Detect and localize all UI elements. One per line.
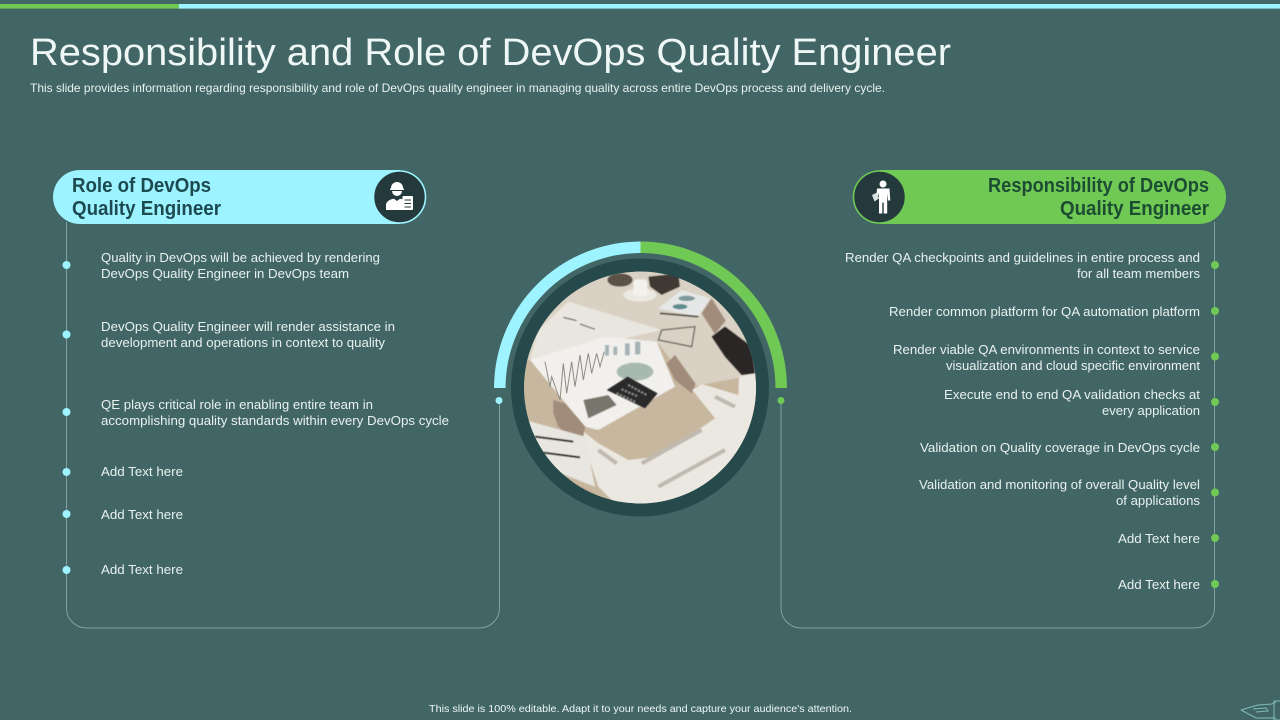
responsibility text: Render viable QA environments in context to service — [893, 343, 1200, 357]
heading pill: role — [53, 170, 400, 224]
responsibility text: Execute end to end QA validation checks at — [944, 388, 1201, 402]
role text: accomplishing quality standards within every DevOps cycle — [101, 414, 449, 428]
panel: role of DevOps quality engineer — [53, 170, 502, 628]
role text: QE plays critical role in enabling entire team in — [101, 398, 373, 412]
photo: team reviewing charts at a desk — [524, 272, 756, 504]
role text: Add Text here — [101, 508, 183, 522]
subtitle: This slide provides information regarding responsibility and role of DevOps quality engineer in managing quality across entire DevOps process and delivery cycle. — [30, 81, 885, 95]
responsibility text: every application — [1102, 404, 1200, 418]
arc: green — [640, 247, 781, 388]
heading pill: responsibility: Quality Engineer — [1060, 198, 1209, 220]
role text: DevOps Quality Engineer in DevOps team — [101, 267, 349, 281]
responsibility text — [845, 251, 1201, 592]
line chart strokes on paper — [545, 352, 604, 400]
heading pill: responsibility — [880, 170, 1226, 224]
icon: engineer with clipboard — [374, 171, 426, 223]
role bullets — [62, 261, 502, 574]
responsibility text: Add Text here — [1118, 532, 1200, 546]
responsibility text: Validation and monitoring of overall Quality level — [919, 478, 1200, 492]
responsibility text: for all team members — [1077, 267, 1200, 281]
role text — [101, 251, 449, 577]
role text: DevOps Quality Engineer will render assistance in — [101, 320, 395, 334]
icon: hand outline — [1241, 701, 1280, 720]
responsibility text: Render common platform for QA automation platform — [889, 305, 1200, 319]
panel outline: role — [66, 222, 500, 628]
arc: cyan — [500, 247, 640, 388]
responsibility text: Validation on Quality coverage in DevOps cycle — [920, 441, 1200, 455]
heading pill: responsibility: Responsibility of DevOps — [988, 175, 1209, 197]
footer note: This slide is 100% editable. Adapt it to your needs and capture your audience's attention. — [429, 703, 852, 715]
icon: standing engineer — [854, 171, 906, 223]
title: Responsibility and Role of DevOps Quality Engineer — [30, 32, 951, 74]
role text: Quality in DevOps will be achieved by rendering — [101, 251, 380, 265]
responsibility bullets — [778, 261, 1219, 588]
central graphic: arcs and photo — [500, 247, 781, 517]
role text: Add Text here — [101, 563, 183, 577]
responsibility text: of applications — [1116, 494, 1200, 508]
dark ring — [511, 258, 769, 516]
heading pill: role: Role of DevOps — [72, 175, 211, 197]
heading pill: role: Quality Engineer — [72, 198, 221, 220]
panel outline: responsibility — [781, 222, 1214, 628]
panel: responsibility of DevOps quality engineer — [778, 170, 1226, 628]
responsibility text: visualization and cloud specific environment — [946, 359, 1201, 373]
top accent bar — [0, 4, 1280, 9]
role text: Add Text here — [101, 465, 183, 479]
responsibility text: Render QA checkpoints and guidelines in entire process and — [845, 251, 1200, 265]
role text: development and operations in context to quality — [101, 336, 386, 350]
responsibility text: Add Text here — [1118, 578, 1200, 592]
